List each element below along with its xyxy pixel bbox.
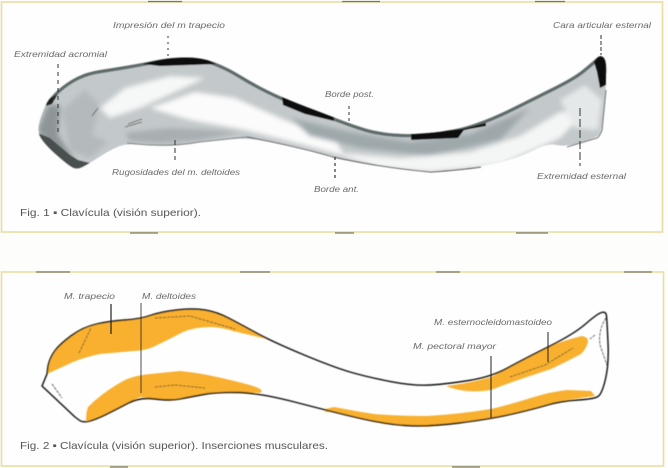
leader lines: figure 1 <box>58 35 601 180</box>
caption: figure 2: Fig. 2 ▪ Clavícula (visión superior). Inserciones musculares. <box>20 440 328 452</box>
panel: figure 1 frame <box>2 2 662 233</box>
insertion: esternocleidomastoideo <box>446 336 588 391</box>
illustration: clavicle superior view photo <box>30 50 615 175</box>
label: M. pectoral mayor: M. pectoral mayor <box>413 341 497 351</box>
leader lines: figure 2 <box>111 303 548 418</box>
inner articular lines and fine rugosities <box>52 316 608 398</box>
label: Rugosidades del m. deltoides: Rugosidades del m. deltoides <box>112 167 241 177</box>
label: M. esternocleidomastoideo: M. esternocleidomastoideo <box>434 317 552 327</box>
label: Extremidad acromial: Extremidad acromial <box>14 49 108 59</box>
label: M. deltoides: M. deltoides <box>142 291 197 301</box>
label: Cara articular esternal: Cara articular esternal <box>553 20 652 30</box>
caption: figure 1: Fig. 1 ▪ Clavícula (visión superior). <box>20 207 201 219</box>
label: Extremidad esternal: Extremidad esternal <box>537 171 627 181</box>
insertion: deltoides <box>86 371 262 421</box>
insertion: trapecio <box>47 309 267 374</box>
label: Borde post.: Borde post. <box>325 89 374 99</box>
label: Impresión del m. trapecio: Impresión del m trapecio <box>113 20 225 30</box>
label: Borde ant.: Borde ant. <box>314 184 359 194</box>
label: M. trapecio: M. trapecio <box>64 291 115 301</box>
illustration: clavicle muscular insertions <box>42 309 608 427</box>
insertion: pectoral mayor <box>325 390 595 427</box>
panel: figure 2 frame <box>2 272 664 467</box>
clavicle outline <box>42 309 608 426</box>
